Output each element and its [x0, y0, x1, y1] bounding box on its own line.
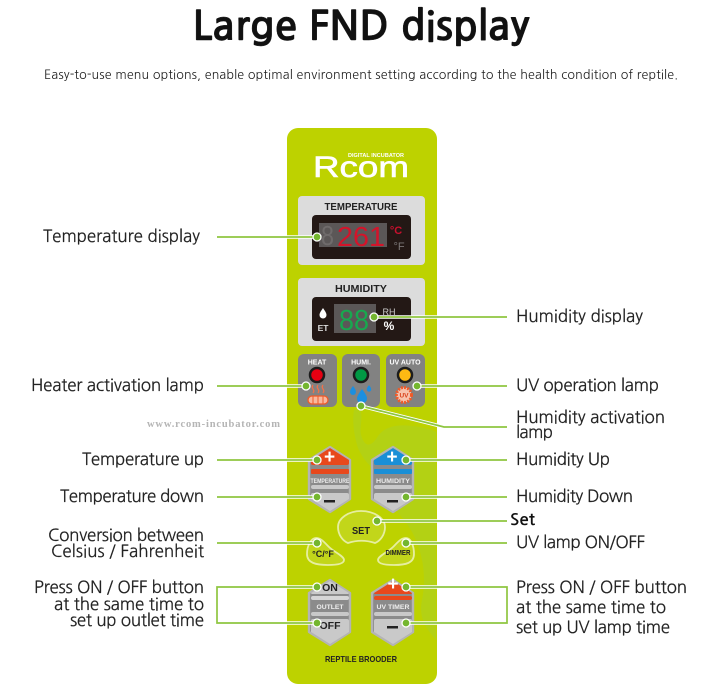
humidity box: HUMIDITY: [335, 284, 387, 295]
temperature box: 261: [337, 221, 385, 252]
button: outlet: OUTLET: [316, 604, 344, 611]
background dragon silhouette: [353, 408, 436, 640]
callout: temperature up: [82, 451, 321, 468]
callout: outlet time: Press ON / OFF button: [34, 579, 204, 596]
button: celsius fahrenheit: [307, 538, 344, 565]
panel footer text: REPTILE BROODER: [325, 654, 397, 664]
callout: outlet time: set up outlet time: [70, 612, 204, 629]
callout: temperature down: Temperature down: [60, 488, 204, 505]
button: temperature: [309, 447, 350, 512]
callout: uv lamp on off: UV lamp ON/OFF: [516, 534, 645, 551]
subtitle: Easy-to-use menu options, enable optimal environment setting according to the health condition of reptile.: [44, 68, 678, 81]
callout: heater lamp: [31, 377, 310, 394]
button: dimmer: DIMMER: [386, 550, 410, 557]
button: humidity: [372, 447, 413, 512]
callout: humidity activation lamp: [357, 402, 665, 441]
callout: uv lamp: UV operation lamp: [516, 377, 659, 394]
callout: conversion: Conversion between: [48, 527, 204, 544]
humidity box: [298, 278, 425, 346]
callout: humidity up: [402, 451, 610, 468]
callout: set: Set: [510, 513, 535, 528]
button: temperature: TEMPERATURE: [310, 478, 350, 485]
callout: temperature display: Temperature display: [43, 228, 200, 245]
lamp: humi: [342, 354, 380, 407]
callout: temperature display: [43, 228, 321, 245]
callout: uv lamp time: at the same time to: [516, 599, 666, 616]
lamp: uv auto: UV: [399, 392, 409, 400]
callout: outlet time: [34, 579, 321, 629]
temperature box: °F: [393, 241, 405, 253]
callout: humidity activation lamp: lamp: [516, 424, 553, 441]
watermark: www.rcom-incubator.com: [147, 419, 280, 430]
humidity box: %: [384, 319, 395, 333]
logo: DIGITAL INCUBATOR: [348, 153, 404, 159]
button: set: [338, 511, 385, 543]
button: uv timer: UV TIMER: [376, 604, 410, 611]
temperature box: 8: [321, 220, 334, 251]
lamp: uv auto: UV AUTO: [389, 360, 421, 366]
temperature box: °C: [390, 225, 402, 237]
humidity box: RH: [382, 307, 396, 317]
callout: uv lamp time: set up UV lamp time: [516, 619, 670, 636]
button: uv timer: +: [387, 574, 399, 595]
callout: humidity activation lamp: Humidity activation: [516, 409, 665, 426]
temperature box: TEMPERATURE: [324, 202, 398, 213]
button: humidity: HUMIDITY: [376, 478, 411, 485]
button: outlet: ON: [322, 582, 338, 594]
callout: uv lamp time: Press ON / OFF button: [516, 579, 687, 596]
title: Large FND display: [192, 6, 530, 46]
humidity box: 88: [339, 305, 369, 337]
callout: temperature down: [60, 488, 321, 505]
callout: humidity down: [402, 488, 633, 505]
callout: conversion: [48, 527, 321, 560]
callout: humidity down: Humidity Down: [516, 488, 633, 505]
button: set: SET: [352, 525, 371, 537]
callout: humidity display: Humidity display: [516, 308, 643, 325]
lamp: humi: HUMI.: [351, 360, 371, 366]
button: uv timer: [372, 574, 413, 645]
lamp: uv auto: [386, 354, 425, 407]
lamp: heat: [298, 354, 337, 407]
button: celsius fahrenheit: °C/°F: [312, 549, 334, 559]
callout: uv lamp: [413, 377, 659, 394]
logo: Rcom: [313, 151, 409, 184]
callout: conversion: Celsius / Fahrenheit: [51, 543, 205, 560]
callout: set: [373, 513, 535, 528]
button: humidity: +: [386, 447, 398, 468]
callout: outlet time: at the same time to: [54, 596, 204, 613]
callout: humidity up: Humidity Up: [516, 451, 610, 468]
lamp: heat: HEAT: [308, 360, 327, 366]
button: outlet: [309, 580, 350, 645]
panel: control panel: [287, 128, 437, 684]
callout: uv lamp on off: [402, 534, 645, 551]
temperature box: [298, 196, 425, 265]
callout: humidity display: [370, 308, 643, 325]
callout: heater lamp: Heater activation lamp: [31, 377, 204, 394]
button: temperature: +: [324, 447, 335, 468]
button: dimmer: [378, 538, 414, 565]
callout: uv lamp time: [402, 579, 687, 636]
callout: temperature up: Temperature up: [82, 451, 204, 468]
humidity box: ET: [318, 323, 329, 333]
button: outlet: OFF: [320, 620, 341, 632]
